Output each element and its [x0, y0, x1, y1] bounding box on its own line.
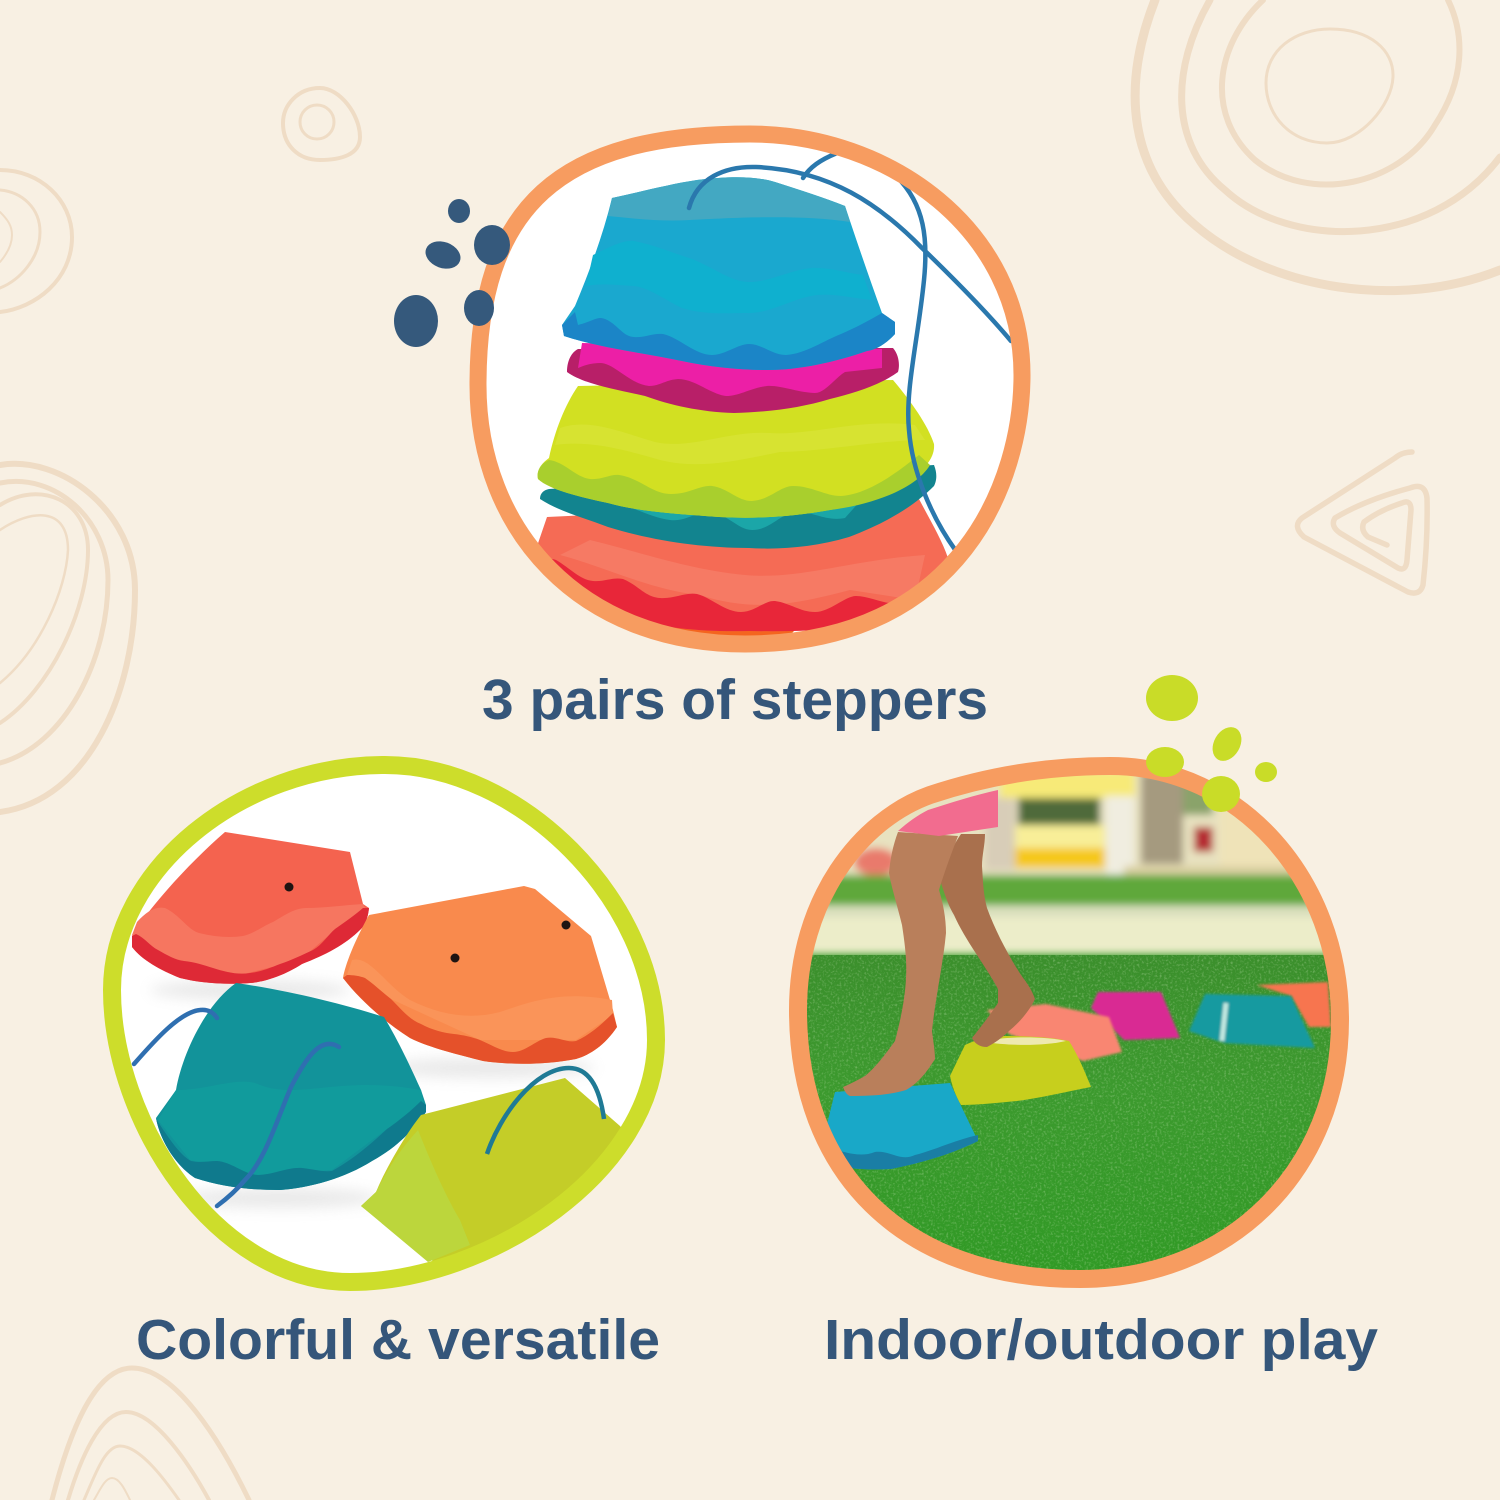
rope: teal stepper: [134, 1010, 339, 1206]
top right rings: [1135, 0, 1500, 291]
panel: indoor outdoor play photo: [780, 750, 1360, 1295]
heading: colorful and versatile: Colorful & versatile: [136, 1308, 660, 1372]
stepper: teal: [156, 983, 426, 1190]
panel: colorful and versatile: [112, 765, 656, 1282]
photo: blurred backdrop: [812, 775, 1324, 955]
stepper: magenta: [567, 348, 899, 413]
bottom left ring: [52, 1368, 249, 1500]
lime stepper: [950, 1036, 1091, 1105]
heading: indoor outdoor play: Indoor/outdoor play: [824, 1308, 1378, 1372]
distant coral stepper right: [1257, 982, 1331, 1027]
left ring lower: [0, 464, 135, 812]
stepper: coral: [132, 832, 369, 984]
shorts: [898, 790, 998, 836]
blue stepper: [824, 1083, 978, 1169]
rope: [689, 153, 1011, 551]
top small ring: [283, 88, 360, 160]
stepper: lime: [538, 380, 934, 518]
stepper: orange lowest: [672, 627, 794, 636]
stepper: lime: [361, 1078, 621, 1261]
stepper: orange: [343, 886, 617, 1064]
dots: lime cluster: [1146, 675, 1277, 812]
left ring upper: [0, 170, 72, 312]
dots: navy cluster: [394, 199, 510, 347]
photo: grass: [808, 955, 1328, 1270]
right triangle: [1297, 452, 1427, 593]
coral stepper: [987, 1004, 1122, 1061]
panel: 3 pairs of steppers: [478, 134, 1022, 655]
stepper: teal: [540, 465, 936, 549]
distant magenta stepper: [1091, 992, 1180, 1040]
back leg: [941, 834, 1035, 1047]
heading: 3 pairs of steppers: 3 pairs of steppers: [482, 668, 988, 732]
stepper: blue top: [562, 177, 895, 370]
soft shadows: [150, 980, 595, 1208]
front leg: [843, 832, 958, 1096]
stepper: coral bottom: [534, 499, 948, 631]
distant teal stepper: [1189, 994, 1315, 1048]
